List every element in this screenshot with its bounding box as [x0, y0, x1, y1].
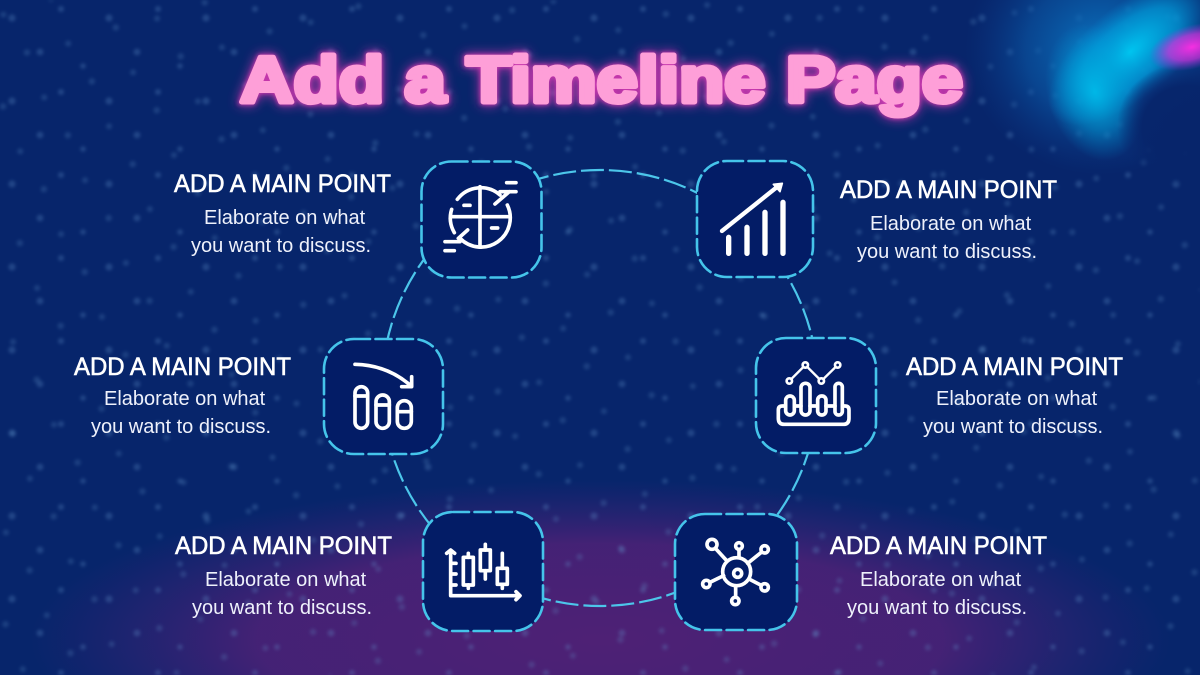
- text: top right: you want to discuss.: [857, 241, 1037, 263]
- text: left: Elaborate on what: [104, 388, 266, 410]
- icon: falling capsule bars: [355, 364, 412, 428]
- text: top right: ADD A MAIN POINT: [840, 176, 1057, 204]
- text: right: Elaborate on what: [936, 388, 1098, 410]
- text: top left: you want to discuss.: [191, 235, 371, 257]
- text: bottom left: you want to discuss.: [192, 597, 372, 619]
- icon: candlestick chart: [447, 544, 520, 600]
- title: Add a Timeline Page: [240, 43, 963, 116]
- step 5: bottom left: [175, 512, 543, 631]
- text: top right: Elaborate on what: [870, 213, 1032, 235]
- icon: pie chart: [445, 183, 516, 251]
- text: top left: ADD A MAIN POINT: [174, 170, 391, 198]
- text: bottom right: you want to discuss.: [847, 597, 1027, 619]
- text: top left: [174, 170, 391, 257]
- text: bottom left: ADD A MAIN POINT: [175, 532, 392, 560]
- text: bottom right: ADD A MAIN POINT: [830, 532, 1047, 560]
- text: right: you want to discuss.: [923, 416, 1103, 438]
- icon box: right: [756, 338, 876, 453]
- text: left: ADD A MAIN POINT: [74, 353, 291, 381]
- step 6: bottom right: [675, 514, 1047, 630]
- icon box: left: [324, 339, 443, 454]
- text: left: [74, 353, 291, 438]
- icon: network hub: [703, 539, 768, 605]
- title: Add a Timeline Page: [240, 43, 963, 116]
- icon box: bottom left: [423, 512, 543, 631]
- step 4: right: [756, 338, 1123, 453]
- text: bottom left: Elaborate on what: [205, 569, 367, 591]
- icon box: bottom right: [675, 514, 797, 630]
- text: left: you want to discuss.: [91, 416, 271, 438]
- icon box: top right: [697, 161, 813, 277]
- text: right: [906, 353, 1123, 438]
- timeline ring: [382, 170, 818, 606]
- step 1: top left: [174, 162, 542, 278]
- icon: growth bars: [722, 183, 783, 253]
- text: bottom left: [175, 532, 392, 619]
- step 3: left: [74, 339, 443, 454]
- text: top right: [840, 176, 1057, 263]
- text: top left: Elaborate on what: [204, 207, 366, 229]
- icon: line and bar chart: [778, 362, 849, 424]
- text: bottom right: Elaborate on what: [860, 569, 1022, 591]
- text: bottom right: [830, 532, 1047, 619]
- text: right: ADD A MAIN POINT: [906, 353, 1123, 381]
- step 2: top right: [697, 161, 1057, 277]
- icon box: top left: [422, 162, 542, 278]
